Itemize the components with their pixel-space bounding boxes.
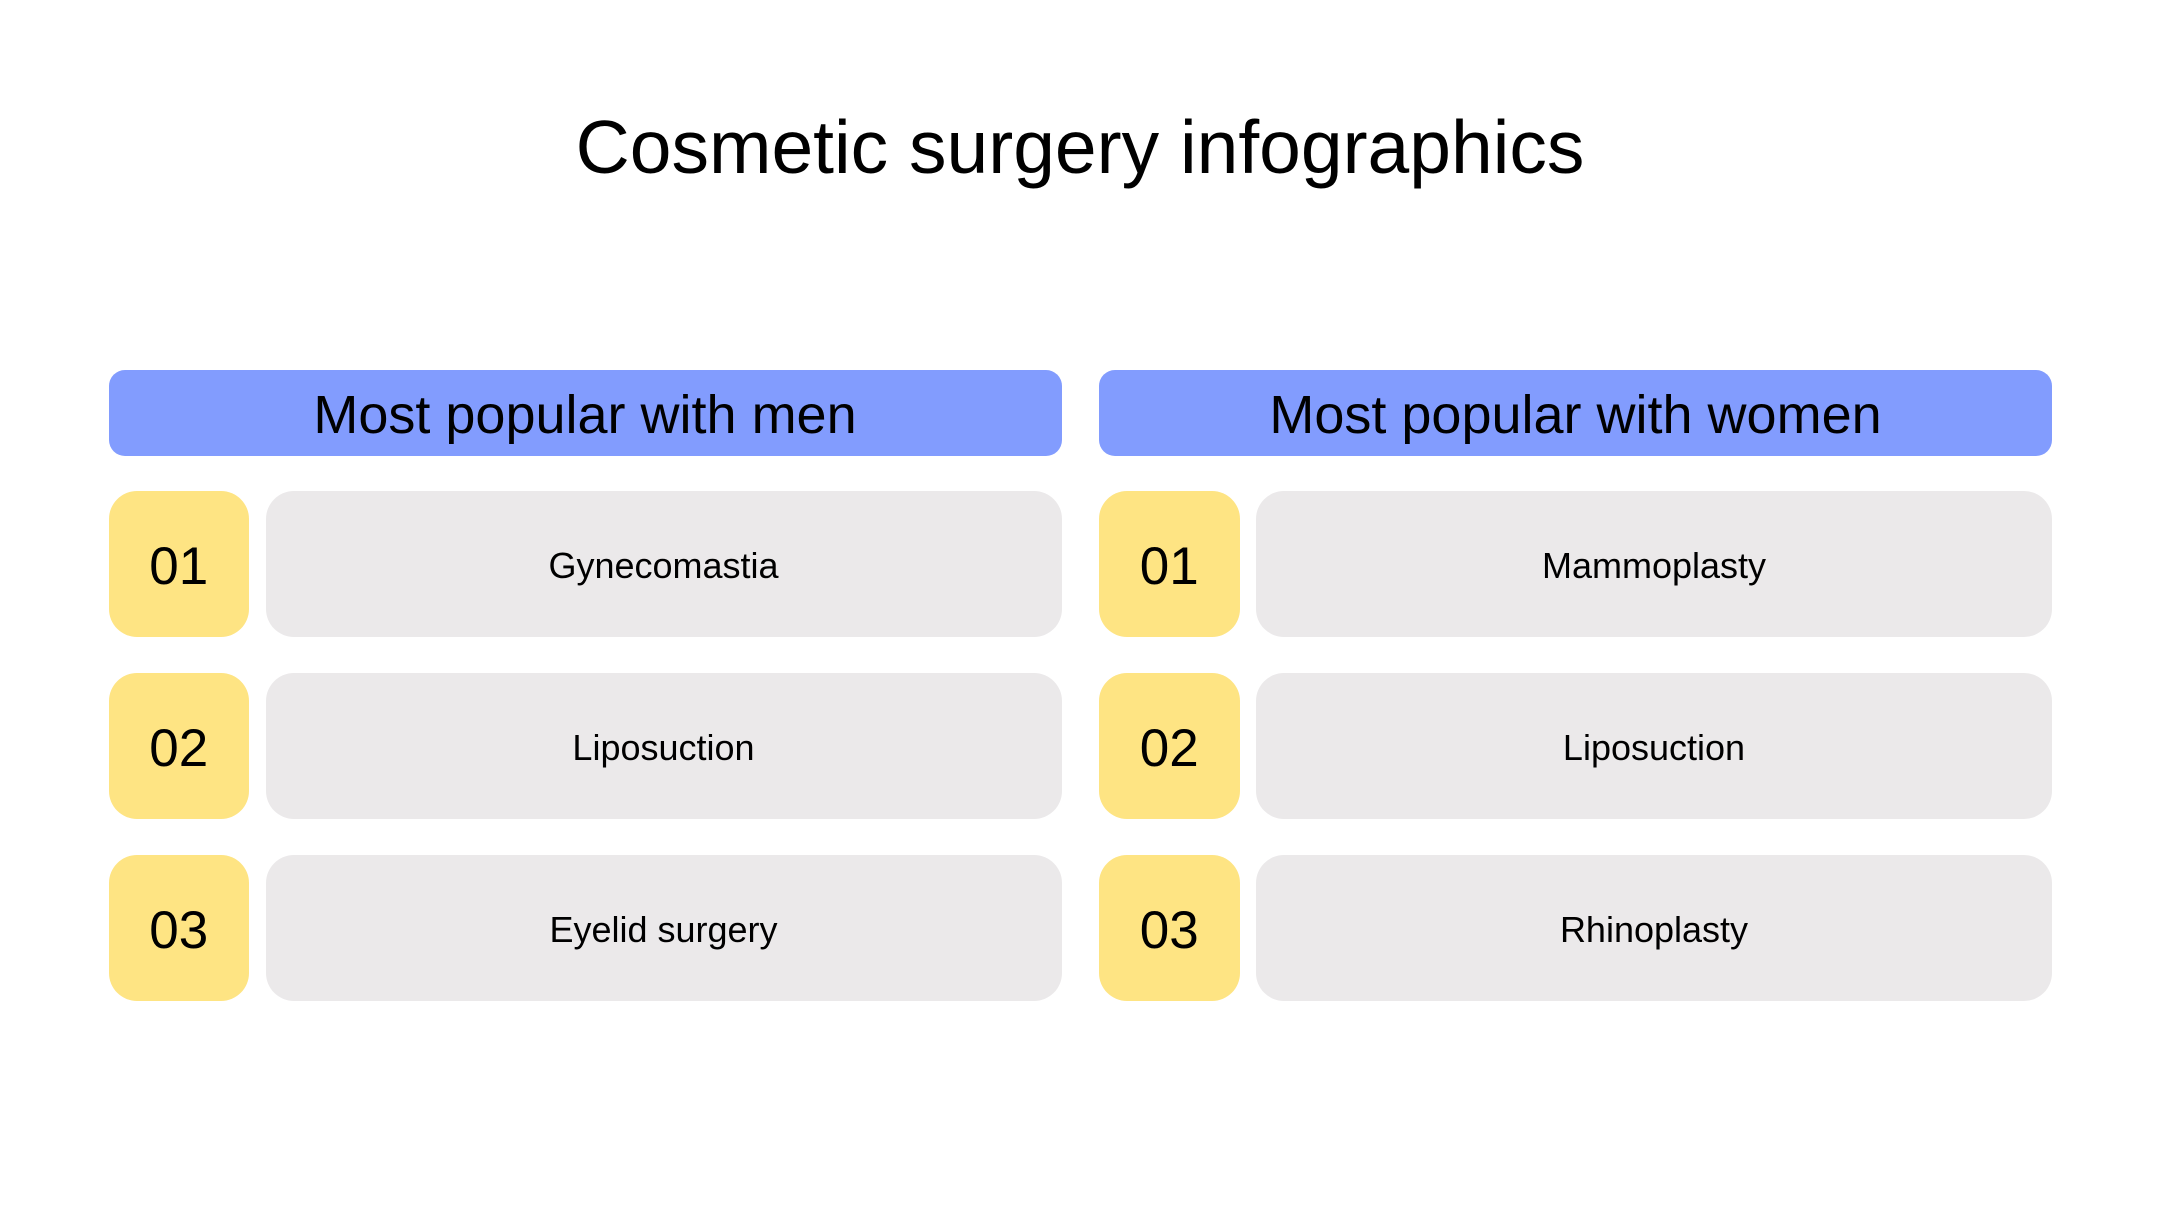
number 02 women: 02 xyxy=(1140,718,1199,778)
heading: men xyxy=(108,370,1062,456)
item: Liposuction men: Liposuction xyxy=(572,726,755,768)
number 03 women: 03 xyxy=(1140,900,1199,960)
panel: most popular with women xyxy=(1099,370,2052,1001)
number 02 men xyxy=(108,673,249,819)
number 03 men xyxy=(108,855,249,1001)
number 01 men xyxy=(108,491,249,637)
number 01 women: 01 xyxy=(1140,536,1199,596)
number 02 women xyxy=(1099,673,1240,819)
item: Liposuction men xyxy=(266,673,1062,819)
number 02 men: 02 xyxy=(149,718,208,778)
item: Mammoplasty xyxy=(1256,491,2052,637)
item: Rhinoplasty: Rhinoplasty xyxy=(1560,908,1748,950)
item: Liposuction women: Liposuction xyxy=(1563,726,1745,768)
item: Gynecomastia: Gynecomastia xyxy=(548,544,779,586)
heading: women: Most popular with women xyxy=(1269,384,1882,444)
number 03 men: 03 xyxy=(149,900,208,960)
item: Eyelid surgery xyxy=(266,855,1062,1001)
heading: women xyxy=(1099,370,2052,456)
item: Gynecomastia xyxy=(266,491,1062,637)
item: Liposuction women xyxy=(1256,673,2052,819)
item: Mammoplasty: Mammoplasty xyxy=(1542,544,1766,586)
number 03 women xyxy=(1099,855,1240,1001)
item: Eyelid surgery: Eyelid surgery xyxy=(549,908,778,950)
heading: men: Most popular with men xyxy=(313,384,857,444)
title: Cosmetic surgery infographics xyxy=(576,105,1584,189)
number 01 women xyxy=(1099,491,1240,637)
number 01 men: 01 xyxy=(149,536,208,596)
panel: most popular with men xyxy=(109,370,1062,1001)
item: Rhinoplasty xyxy=(1256,855,2052,1001)
